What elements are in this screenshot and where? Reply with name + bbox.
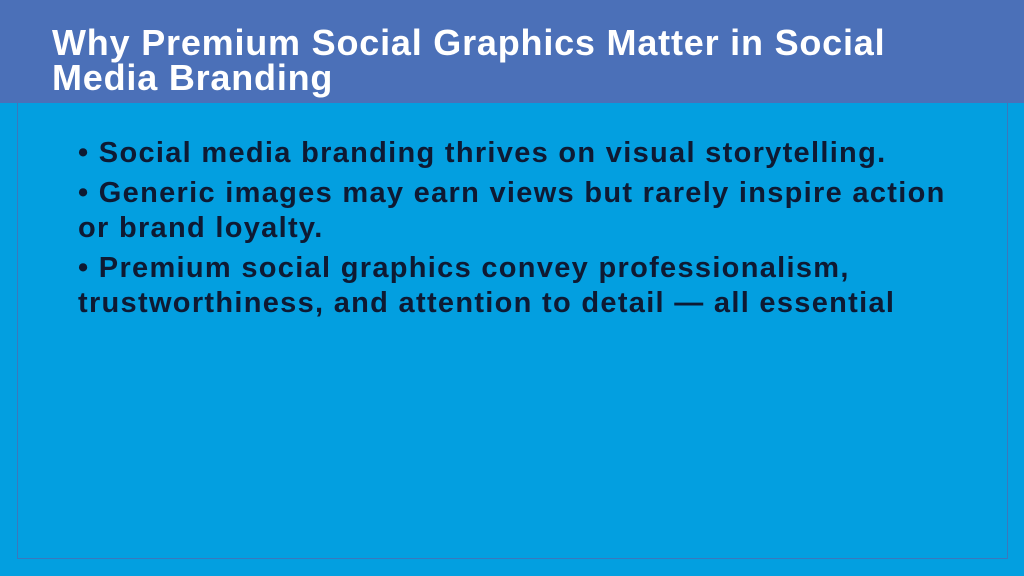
content frame [17, 103, 1008, 559]
bullet list [78, 137, 946, 319]
title [52, 22, 885, 98]
bullet list: • Generic images may earn views but rarely inspire action [78, 177, 946, 209]
header band [0, 0, 1024, 103]
bullet list: • Premium social graphics convey professionalism, [78, 252, 850, 284]
title: Why Premium Social Graphics Matter in Social [52, 22, 885, 63]
title: Media Branding [52, 57, 333, 98]
bullet list: • Social media branding thrives on visual storytelling. [78, 137, 886, 169]
bullet list: or brand loyalty. [78, 212, 324, 244]
bullet list: trustworthiness, and attention to detail — all essential [78, 287, 895, 319]
